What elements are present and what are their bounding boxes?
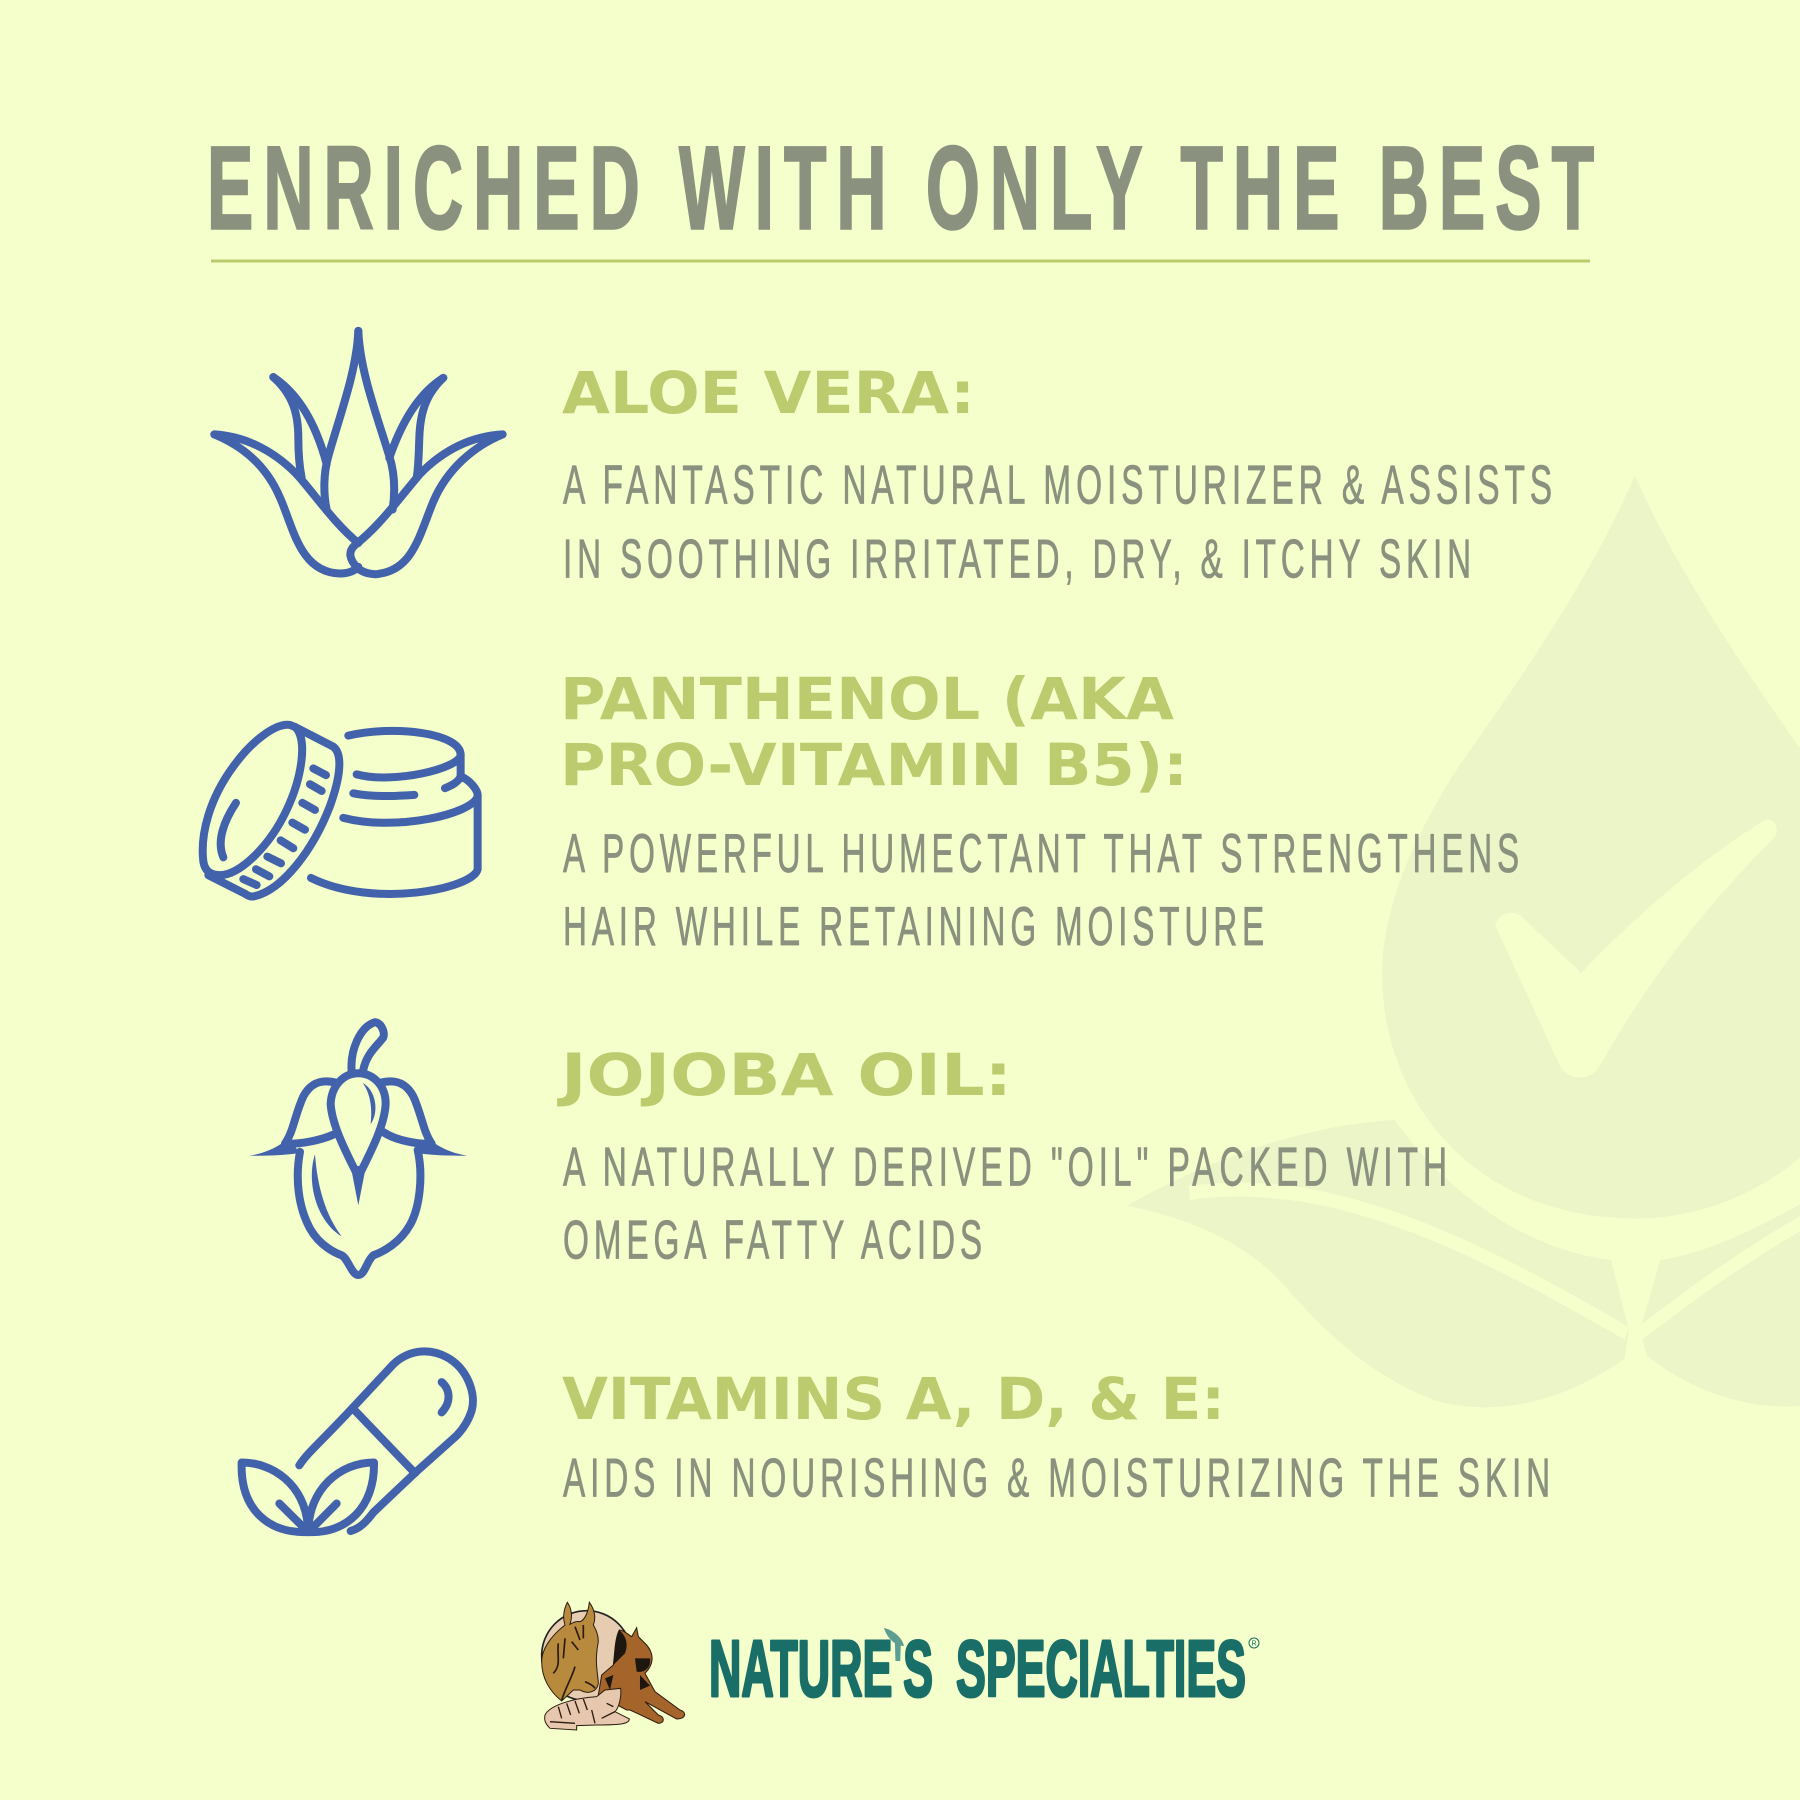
logo wordmark: SPECIALTIES xyxy=(956,1624,1246,1713)
text: aloe vera description xyxy=(563,454,1557,590)
logo wordmark xyxy=(709,1624,1259,1713)
logo: horse dog and cat illustration xyxy=(542,1602,685,1730)
logo wordmark: NATURE'S xyxy=(709,1624,933,1713)
heading: panthenol: PRO-VITAMIN B5): xyxy=(560,731,1188,799)
title underline xyxy=(211,260,1590,262)
heading: vitamins: VITAMINS A, D, & E: xyxy=(562,1365,1225,1433)
heading: aloe vera: ALOE VERA: xyxy=(562,359,975,427)
text: panthenol description xyxy=(563,822,1524,957)
text: panthenol description: HAIR WHILE RETAINING MOISTURE xyxy=(563,895,1269,957)
heading: panthenol xyxy=(560,665,1188,799)
icon: capsule with leaves xyxy=(242,1351,473,1532)
heading: jojoba oil: JOJOBA OIL: xyxy=(556,1041,1012,1109)
background watermark: drop with check and leaves xyxy=(1127,476,1800,1407)
icon: jar with lid xyxy=(203,725,478,897)
icon: jojoba fruit xyxy=(249,1022,467,1275)
icon: aloe vera plant xyxy=(214,331,503,574)
text: jojoba description: OMEGA FATTY ACIDS xyxy=(563,1208,987,1270)
text: jojoba description xyxy=(563,1136,1452,1270)
heading: panthenol: PANTHENOL (AKA xyxy=(560,665,1174,733)
logo wordmark: R xyxy=(1251,1640,1257,1648)
